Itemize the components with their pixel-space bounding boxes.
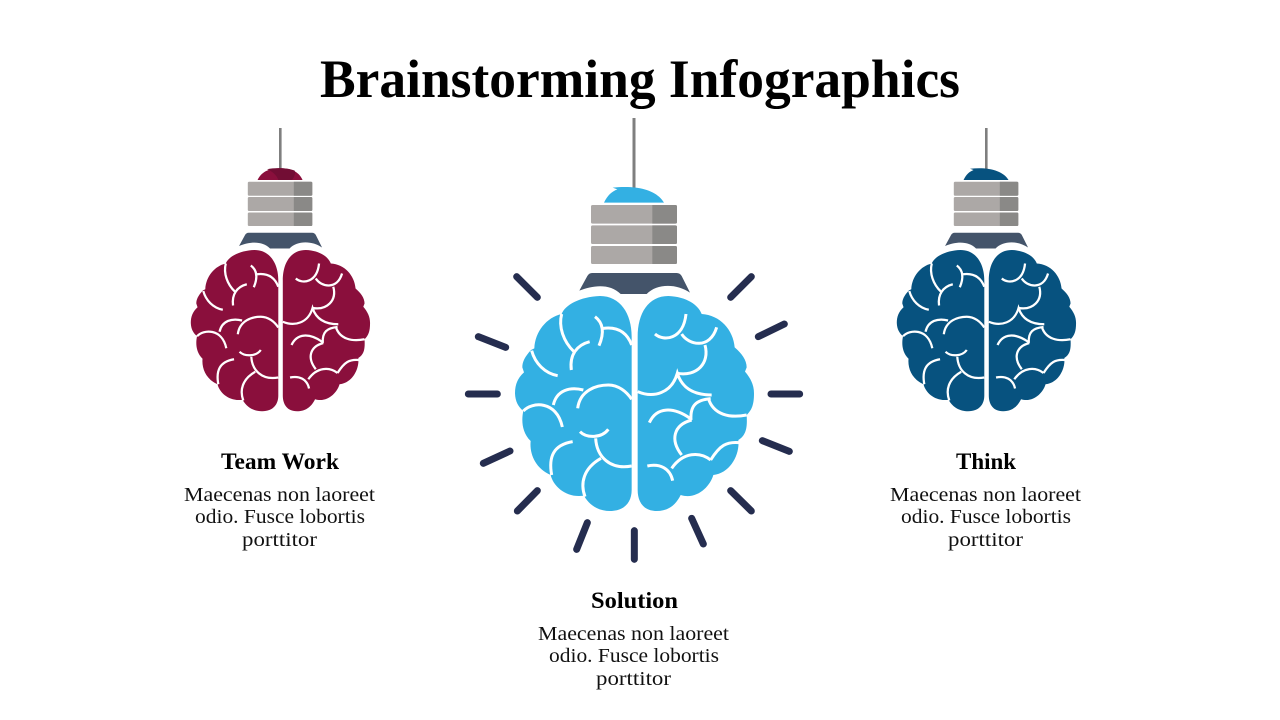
text block: solution [538, 623, 729, 690]
icon: radiating rays [468, 277, 800, 559]
panel: team work [184, 128, 375, 551]
title: Brainstorming Infographics [320, 49, 960, 109]
icon: maroon brain bulb [191, 128, 370, 411]
text block: think: odio. Fusce lobortis [901, 506, 1071, 528]
text block: think [890, 484, 1081, 551]
icon: dark blue brain bulb [897, 128, 1076, 411]
text block: think: porttitor [948, 529, 1023, 551]
heading: solution: Solution [591, 588, 678, 613]
text block: team work [184, 484, 375, 551]
icon: light blue brain bulb [515, 118, 754, 511]
text block: solution: porttitor [596, 668, 671, 690]
heading: think: Think [956, 449, 1016, 474]
text block: solution: Maecenas non laoreet [538, 623, 729, 645]
text block: team work: odio. Fusce lobortis [195, 506, 365, 528]
panel: solution [468, 118, 800, 690]
text block: team work: porttitor [242, 529, 317, 551]
text block: think: Maecenas non laoreet [890, 484, 1081, 506]
text block: solution: odio. Fusce lobortis [549, 645, 719, 667]
text block: team work: Maecenas non laoreet [184, 484, 375, 506]
panel: think [890, 128, 1081, 551]
heading: team work: Team Work [221, 449, 339, 474]
